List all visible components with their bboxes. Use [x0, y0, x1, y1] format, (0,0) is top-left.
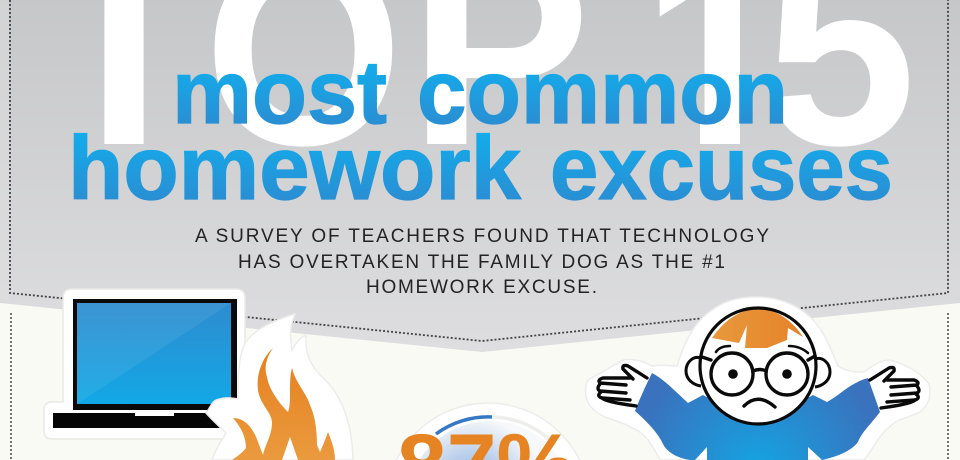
subtitle text: A SURVEY OF TEACHERS FOUND THAT TECHNOLOGY [195, 226, 769, 247]
background title: TOP 15 [41, 0, 916, 202]
character: shrugging student [586, 297, 930, 460]
title: most common homework excuses: most [172, 43, 387, 143]
hair [712, 309, 803, 348]
title: most common homework excuses: common [417, 43, 788, 143]
left hand [598, 365, 647, 406]
subtitle text: HAS OVERTAKEN THE FAMILY DOG AS THE #1 [238, 252, 725, 273]
icon: laptop [44, 289, 262, 439]
subtitle text: HOMEWORK EXCUSE. [366, 277, 597, 298]
ears [686, 357, 703, 386]
subtitle text [195, 226, 769, 298]
shirt [635, 373, 880, 460]
glasses and face [702, 346, 815, 407]
title: most common homework excuses: homework [68, 119, 522, 219]
title: most common homework excuses [68, 43, 893, 219]
icon: flame [206, 314, 353, 460]
head [700, 308, 816, 424]
sticker outline [586, 297, 930, 460]
right hand [870, 367, 919, 408]
title: most common homework excuses: excuses [550, 119, 893, 219]
